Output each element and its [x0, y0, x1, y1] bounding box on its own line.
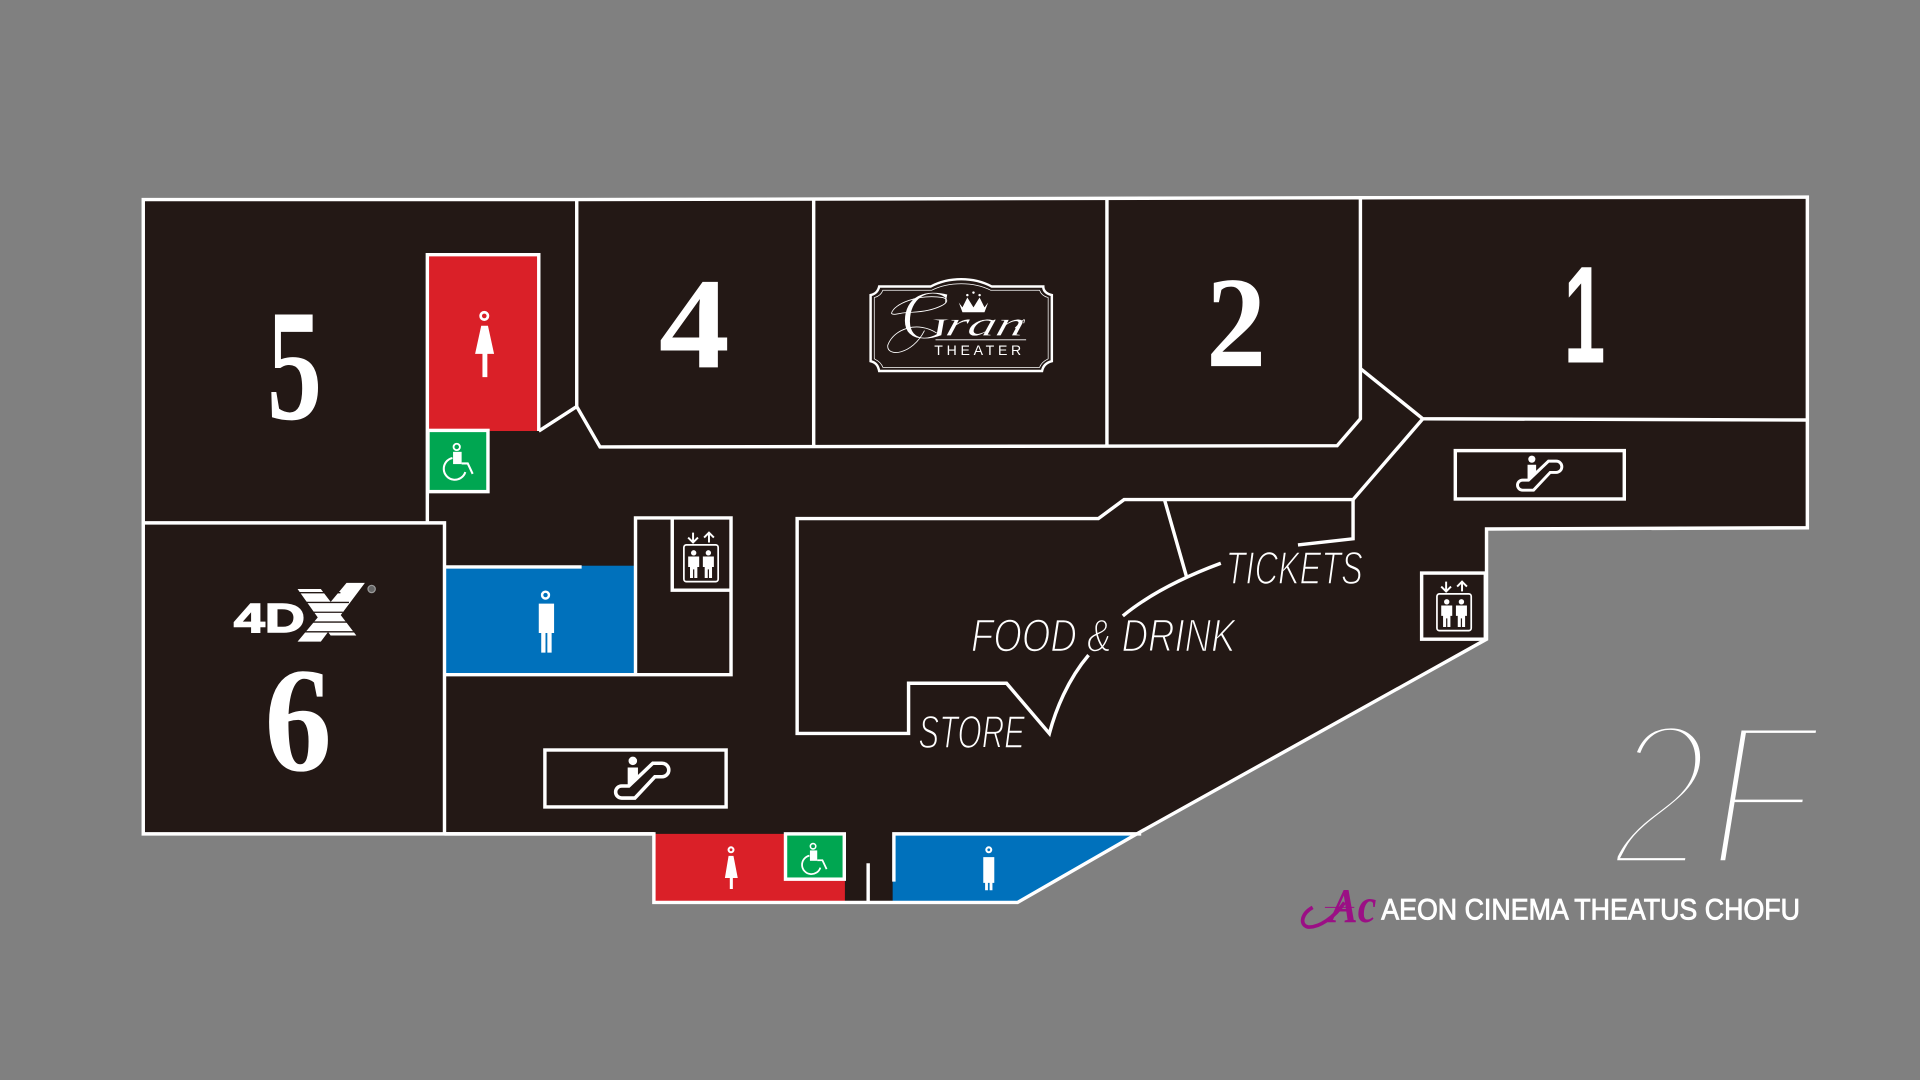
- screen number 2: 2: [1206, 251, 1266, 395]
- label: store: STORE: [918, 706, 1026, 758]
- escalator upper right: [1455, 451, 1624, 499]
- restroom: women upper: [427, 255, 539, 431]
- building floor plate: [143, 197, 1807, 902]
- Gran Theater logo: G: [900, 277, 951, 355]
- Gran Theater logo: THEATER: [934, 342, 1021, 358]
- accessible restroom upper: [428, 430, 488, 492]
- floor label 2F: 2F: [1610, 680, 1823, 912]
- screen number 4: 4: [659, 252, 730, 396]
- Gran Theater logo: ran: [942, 305, 1030, 343]
- cinema logo: [1303, 878, 1377, 933]
- cinema name: AEON CINEMA THEATUS CHOFU: [1381, 894, 1800, 927]
- cinema logo: Ac: [1327, 878, 1377, 933]
- screen number 1: 1: [1564, 238, 1605, 392]
- Gran Theater logo: [871, 277, 1052, 371]
- elevator right: [1422, 573, 1485, 639]
- restroom: men lower: [893, 833, 1141, 902]
- escalator lower left: [545, 750, 726, 807]
- restroom: women lower: [654, 834, 845, 902]
- restroom: men left: [444, 566, 636, 675]
- 4DX logo: 4D: [234, 595, 305, 641]
- label: food and drink: FOOD & DRINK: [971, 609, 1237, 661]
- elevator left: [672, 518, 731, 590]
- screen number 5: 5: [267, 278, 322, 454]
- 4DX logo: [234, 583, 375, 642]
- accessible restroom lower: [786, 834, 844, 879]
- walls and room outlines: [143, 197, 1807, 902]
- label: tickets: TICKETS: [1226, 542, 1363, 594]
- screen number 6: 6: [264, 638, 332, 803]
